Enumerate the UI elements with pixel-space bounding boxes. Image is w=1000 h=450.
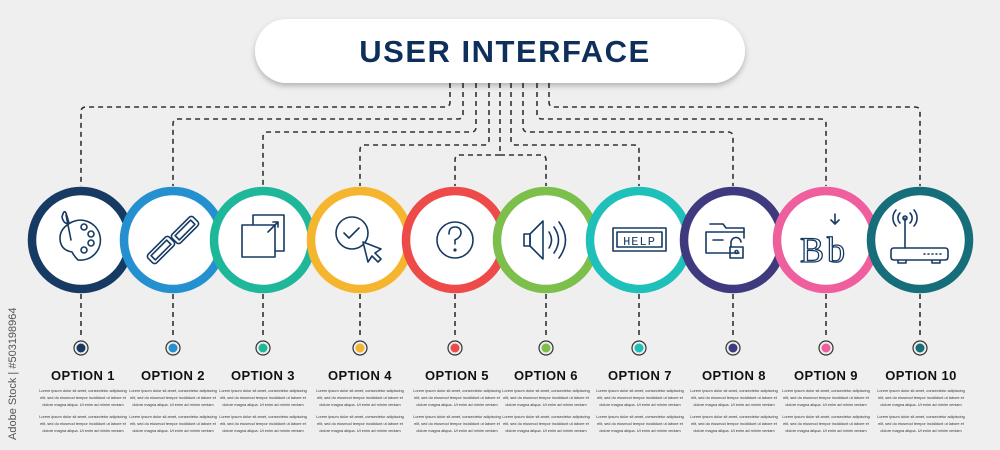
icon: Bb	[800, 214, 845, 270]
icon: palette	[60, 212, 100, 260]
descriptions: dolore magna aliqua. Ut enim ad minim veniam	[42, 428, 124, 433]
descriptions: elit, sed do eiusmod tempor incididunt ut labore et	[40, 421, 127, 426]
option labels: OPTION 10	[885, 368, 957, 383]
option labels: OPTION 6	[514, 368, 578, 383]
title	[255, 19, 745, 83]
connectors	[81, 83, 920, 338]
title: USER INTERFACE	[359, 34, 651, 69]
circles	[32, 191, 969, 289]
icons	[60, 210, 948, 270]
option labels: OPTION 9	[794, 368, 858, 383]
icon: chain	[146, 215, 200, 265]
icon: resize	[242, 215, 284, 257]
option labels: OPTION 3	[231, 368, 295, 383]
option labels: OPTION 2	[141, 368, 205, 383]
option labels: OPTION 8	[702, 368, 766, 383]
option labels	[51, 368, 957, 383]
descriptions: dolore magna aliqua. Ut enim ad minim veniam	[42, 402, 124, 407]
icon: speaker	[524, 221, 566, 259]
icon: folder lock	[706, 224, 744, 258]
descriptions: Lorem ipsum dolor sit amet, consectetur adipiscing	[39, 414, 127, 419]
option labels: OPTION 4	[328, 368, 392, 383]
option labels: OPTION 1	[51, 368, 115, 383]
descriptions: elit, sed do eiusmod tempor incididunt ut labore et	[40, 395, 127, 400]
dots	[74, 341, 927, 355]
icon: Bb: b	[827, 230, 845, 270]
icon: help key	[613, 228, 666, 251]
watermark side text: Adobe Stock | #503198964	[7, 307, 19, 440]
icon: question	[437, 222, 473, 258]
option labels: OPTION 5	[425, 368, 489, 383]
descriptions: Lorem ipsum dolor sit amet, consectetur adipiscing	[39, 388, 127, 393]
icon: help key: HELP	[623, 235, 656, 249]
option labels: OPTION 7	[608, 368, 672, 383]
icon: router	[891, 210, 948, 263]
descriptions	[39, 388, 965, 433]
icon: Bb: B	[800, 230, 824, 270]
icon: check cursor	[336, 217, 381, 262]
